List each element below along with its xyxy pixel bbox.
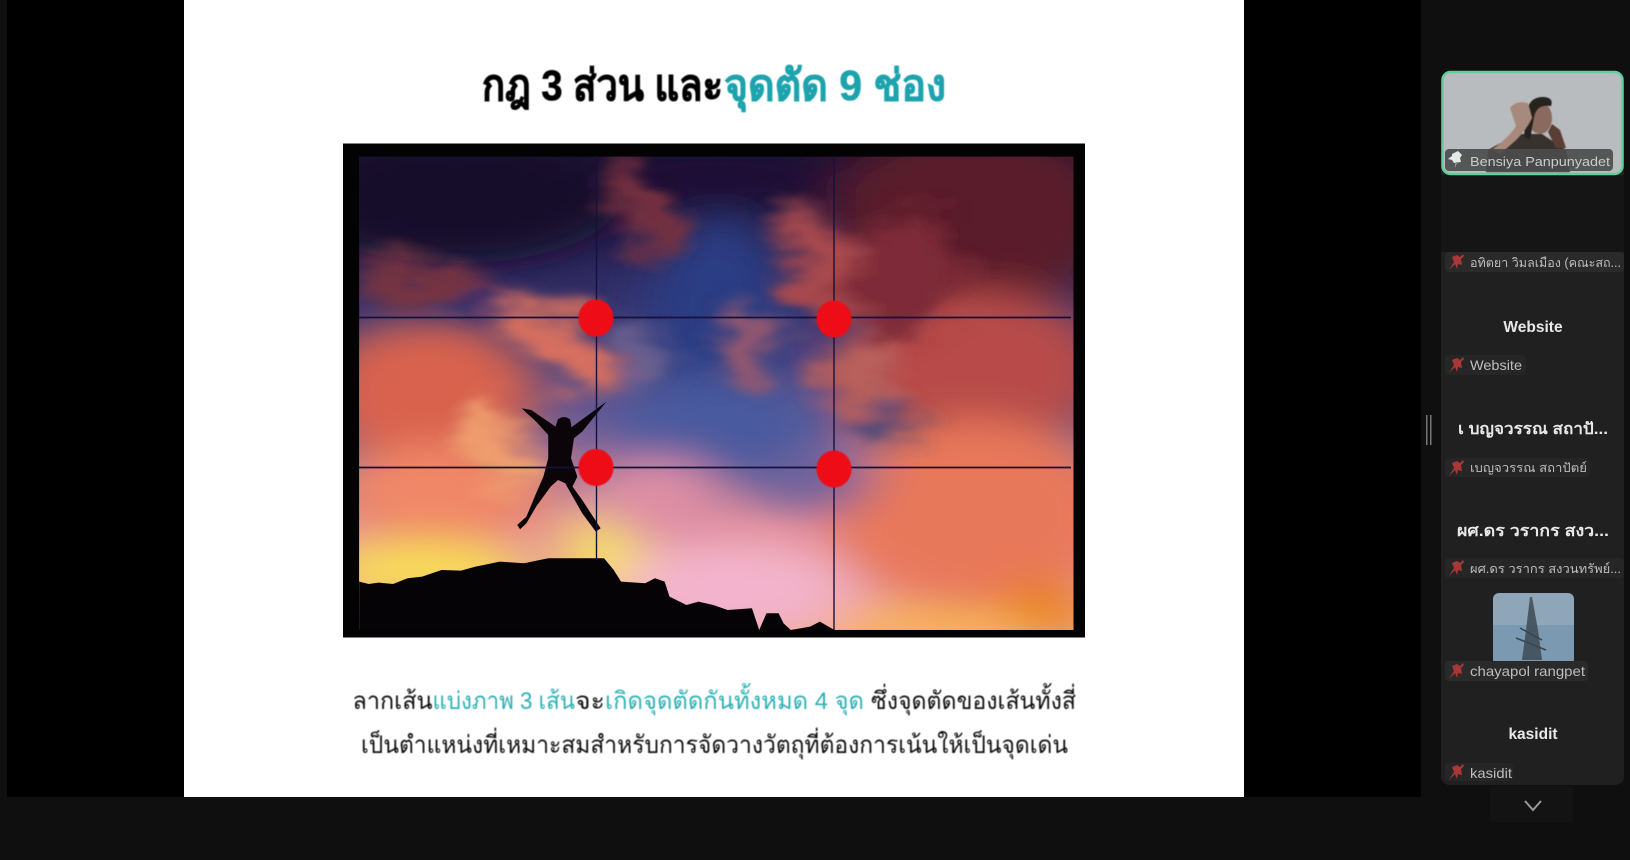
participant: เบญจวรรณ [1445, 420, 1608, 477]
participant label: อทิตยา [1445, 252, 1624, 272]
participant: chayapol rangpet with avatar [1445, 593, 1588, 681]
participant: chayapol rangpet with avatar: chayapol rangpet [1470, 663, 1585, 679]
caption: two-line explanation: เกิดจุดตัดกันทั้งหมด 4 จุด [605, 683, 864, 716]
title: rule of thirds heading: กฎ 3 ส่วน และ [482, 62, 723, 110]
caption: two-line explanation: เป็นตำแหน่งที่เหมาะสมสำหรับการจัดวางวัตถุที่ต้องการเน้นให้เป็นจุดเด่น [361, 727, 1068, 760]
photo frame: black border [343, 144, 1085, 638]
sidebar resize handle [1426, 415, 1432, 445]
title: rule of thirds heading: จุดตัด 9 ช่อง [724, 62, 946, 113]
scroll down chevron button [1490, 786, 1573, 822]
avatar: radio tower photo [1493, 593, 1574, 665]
name bar: Bensiya Panpunyadet [1470, 154, 1610, 169]
person in speaker video [1486, 97, 1570, 172]
caption: two-line explanation: จะ [575, 688, 605, 715]
participant: เบญจวรรณ: เ บญจวรรณ สถาปั... [1458, 420, 1608, 439]
silhouette: hill [359, 558, 834, 630]
grid lines: rule of thirds [359, 156, 1071, 630]
caption: two-line explanation: แบ่งภาพ 3 เส้น [432, 688, 575, 715]
photo: sunset sky with silhouette [359, 156, 1074, 630]
participant: kasidit [1445, 726, 1558, 781]
name bar [1445, 149, 1613, 171]
participant: ผศ.ดร วรากร: ผศ.ดร วรากร สงว... [1457, 523, 1609, 540]
slide: white panel [184, 0, 1244, 797]
participant: Website: Website [1503, 319, 1563, 336]
participant label: อทิตยา: อทิตยา วิมลเมือง (คณะสถ... [1470, 256, 1621, 270]
speaker tile: Bensiya Panpunyadet [1442, 72, 1622, 174]
caption: two-line explanation [352, 683, 1076, 760]
participant: ผศ.ดร วรากร: ผศ.ดร วรากร สงวนทรัพย์... [1470, 562, 1621, 576]
participant: kasidit: kasidit [1470, 765, 1512, 781]
caption: two-line explanation: ซึ่งจุดตัดของเส้นทั้งสี่ [871, 683, 1076, 716]
participant: kasidit: kasidit [1508, 726, 1558, 743]
participant: ผศ.ดร วรากร [1445, 523, 1624, 578]
participant: เบญจวรรณ: เบญจวรรณ สถาปัตย์ [1470, 461, 1587, 475]
title: rule of thirds heading [482, 62, 946, 113]
participant: Website: Website [1470, 357, 1522, 373]
participant: Website [1445, 319, 1563, 375]
intersection points: four red dots [578, 300, 852, 488]
participants panel background [1441, 76, 1624, 785]
silhouette: jumping person [517, 402, 606, 532]
caption: two-line explanation: ลากเส้น [352, 688, 433, 715]
